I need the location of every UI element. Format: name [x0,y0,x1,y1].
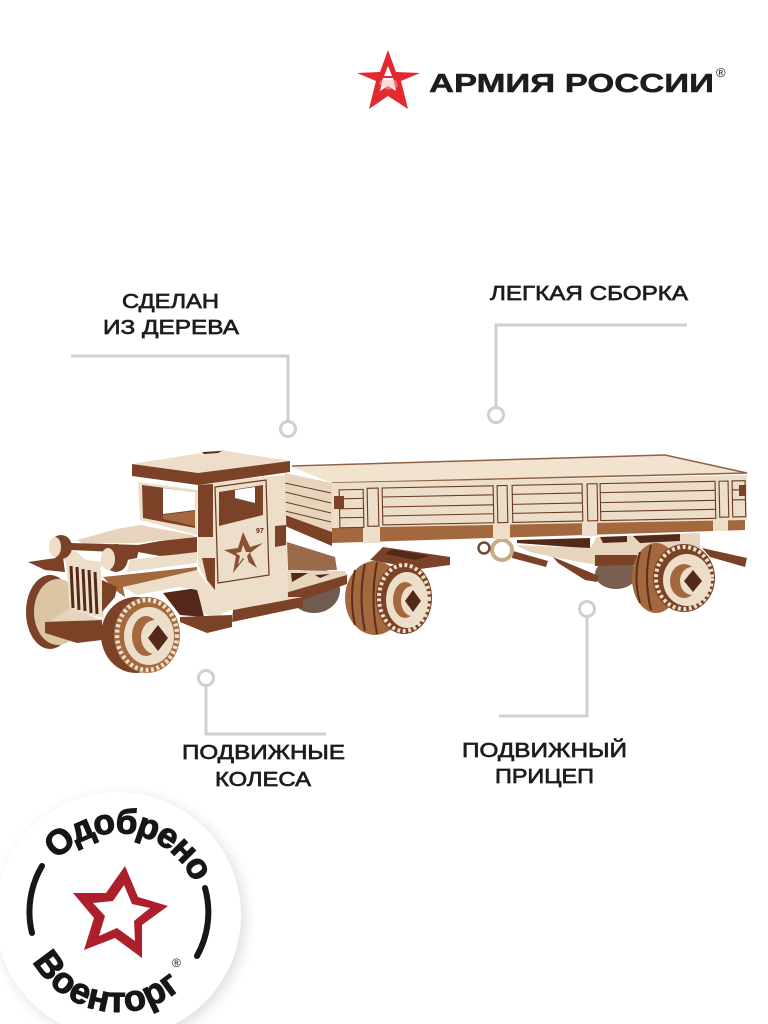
cab roof [132,450,290,485]
corner pillar [198,484,213,537]
cab front with windscreen [138,482,198,535]
truck rear wheel [345,561,432,635]
side board grooves [339,481,746,528]
logo: Армия России [357,50,726,109]
badge: Одобрено Военторг [0,792,249,1024]
front wheel [101,597,180,673]
badge top text: Одобрено [46,808,208,880]
logo wordmark: АРМИЯ РОССИИ [429,68,714,98]
door star [224,532,263,573]
label: подвижный прицеп [462,738,627,788]
label: подвижный прицеп: ПРИЦЕП [495,766,594,788]
door [215,480,269,583]
registered mark: ® [716,65,726,80]
trailer bed interior [292,455,745,483]
label: подвижные колеса: КОЛЕСА [215,769,312,791]
stakes [363,527,380,543]
bumper [28,557,65,572]
label: сделан из дерева: СДЕЛАН [122,291,219,313]
callout line: wheels [198,670,326,734]
label: подвижные колеса [182,742,345,791]
trailer undercarriage [478,533,747,582]
trailer end panel [285,473,332,546]
grille [66,561,104,618]
badge bottom text: Военторг [32,948,176,1014]
far wheels [26,559,637,649]
door window [219,485,263,526]
trailer wheel [632,543,715,613]
label: подвижные колеса: ПОДВИЖНЫЕ [182,742,345,764]
badge arc left [29,866,42,933]
icon: red star [357,50,420,109]
badge star [73,866,168,958]
hood [60,525,197,572]
drawbar ring [492,540,512,560]
front frame [45,608,102,643]
callout line: trailer [499,602,594,716]
callout line: assembly [488,325,687,422]
truck chassis [285,542,450,602]
trailer bed rim [292,455,747,483]
door emblem: 97 [256,528,264,535]
label: сделан из дерева [103,291,240,339]
label: легкая сборка: ЛЕГКАЯ СБОРКА [490,283,689,305]
truck cab side [198,475,288,613]
coupling hook [478,542,490,554]
fender and running board [102,567,303,633]
label: сделан из дерева: ИЗ ДЕРЕВА [103,317,240,339]
label: подвижный прицеп: ПОДВИЖНЫЙ [462,738,627,762]
headlights [49,535,128,572]
badge arc right [197,888,208,956]
trailer side panel [332,475,747,543]
badge registered mark: ® [172,956,181,970]
callout line: wood [71,356,296,436]
truck and trailer model [26,450,747,673]
